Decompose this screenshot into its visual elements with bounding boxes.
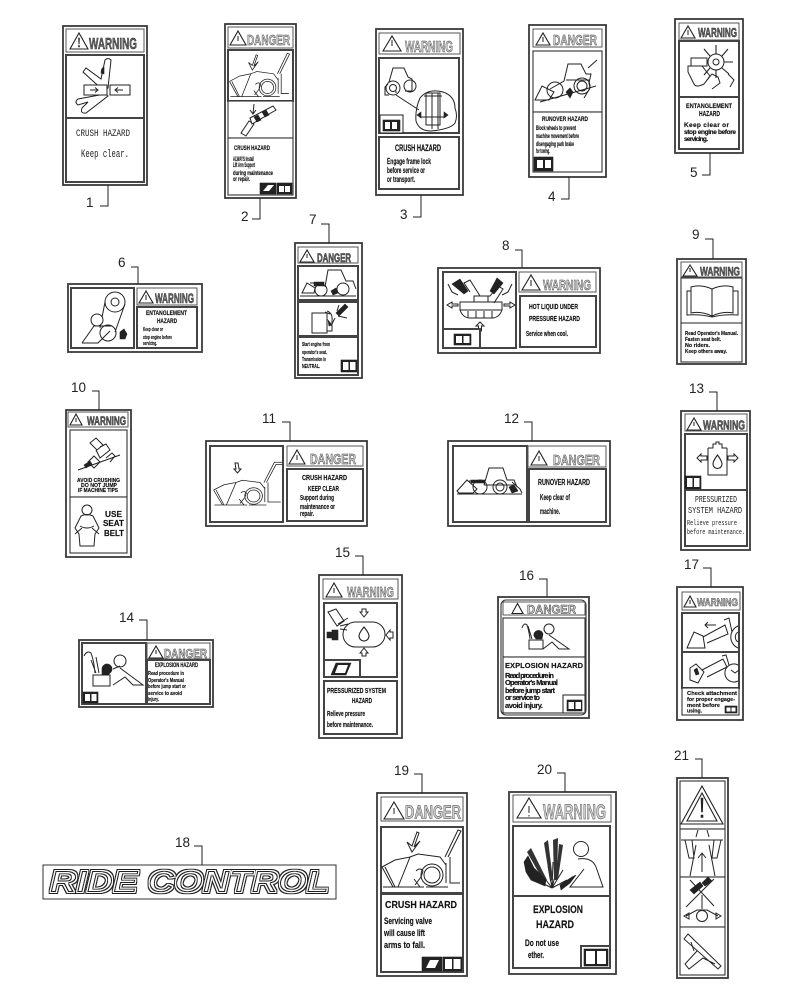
panel: text: CRUSH HAZARD xyxy=(302,473,347,482)
panel: text: HAZARD xyxy=(699,111,720,118)
callout 21 xyxy=(674,748,702,778)
callout 12 xyxy=(504,411,532,441)
panel: text: service to avoid xyxy=(148,691,182,697)
decal 17: check attachment xyxy=(677,587,743,720)
callout 20: 20 xyxy=(537,762,552,777)
panel: text: SYSTEM HAZARD xyxy=(688,506,742,516)
panel: battery explosion xyxy=(503,618,585,657)
header: warning xyxy=(379,33,460,56)
header: danger: DANGER xyxy=(553,452,600,469)
panel: text: machine. xyxy=(540,507,560,516)
panel: manual icon xyxy=(324,660,360,677)
panel: text: for proper engage- xyxy=(687,697,735,703)
panel: text: operator's seat. xyxy=(302,350,327,356)
panel: lift arm illustration xyxy=(210,446,283,522)
panel: seat belt: BELT xyxy=(104,529,124,538)
callout 2 xyxy=(241,198,260,224)
panel: text: for towing. xyxy=(536,149,550,155)
panel: text: HOT LIQUID UNDER xyxy=(529,304,578,311)
panel: text: CRUSH HAZARD xyxy=(395,143,441,153)
panel: text: PRESSURIZED xyxy=(695,495,737,505)
panel: text: Keep clear or xyxy=(143,327,163,333)
callout 15: 15 xyxy=(335,545,350,560)
decal 7: danger runover and start xyxy=(295,243,362,378)
panel: text: disengaging park brake xyxy=(536,142,574,148)
panel: text: ment before xyxy=(687,703,720,709)
callout 5 xyxy=(690,153,710,180)
header: warning: WARNING xyxy=(700,264,740,278)
callout 18: 18 xyxy=(175,835,190,850)
panel: text: avoid injury. xyxy=(505,701,543,710)
callout 18 xyxy=(175,835,202,865)
panel: hand with shock xyxy=(298,302,358,336)
panel: text: Start engine from xyxy=(302,342,330,348)
panel: text xyxy=(533,112,602,172)
panel: text xyxy=(147,660,210,704)
decal 14: explosion hazard horizontal xyxy=(79,640,213,707)
panel: text: CRUSH HAZARD xyxy=(385,899,457,911)
header: danger: DANGER xyxy=(527,602,576,616)
header: danger: DANGER xyxy=(553,32,597,49)
panel: text: EXPLOSION HAZARD xyxy=(155,663,198,669)
callout 7 xyxy=(309,212,329,243)
callout 11: 11 xyxy=(262,411,276,426)
panel: text xyxy=(682,688,739,715)
callout 14: 14 xyxy=(119,610,135,625)
panel: text: NEUTRAL. xyxy=(302,364,320,370)
panel: loader illustration xyxy=(298,266,358,300)
panel: text: stop engine before xyxy=(143,335,172,341)
panel: text: before maintenance. xyxy=(327,720,373,729)
header: danger xyxy=(533,29,602,49)
panel: lift arm illustration xyxy=(381,827,463,893)
panel: text xyxy=(228,138,293,195)
panel: alert triangle xyxy=(680,781,725,829)
panel: lift arrow xyxy=(680,829,725,877)
decal 11: crush hazard keep clear xyxy=(206,441,367,526)
callout 10 xyxy=(71,380,99,410)
decal 19: crush hazard valve xyxy=(377,793,467,976)
panel: text: RUNOVER HAZARD xyxy=(538,478,590,487)
header: warning xyxy=(66,29,144,53)
panel: manual and text xyxy=(681,278,742,362)
panel: text: RUNOVER HAZARD xyxy=(542,116,588,123)
panel: text: KEEP CLEAR xyxy=(308,484,339,493)
panel: text: CRUSH HAZARD xyxy=(234,145,270,152)
callout 7: 7 xyxy=(309,212,317,227)
panel: text: before jump start or xyxy=(148,684,187,690)
callout 12: 12 xyxy=(504,411,519,426)
panel: text: Relieve pressure xyxy=(687,520,737,528)
panel: text xyxy=(679,97,739,149)
panel: text: Keep clear or xyxy=(684,122,729,129)
header: danger: DANGER xyxy=(405,802,461,822)
panel: crush text: CRUSH HAZARD xyxy=(76,129,130,140)
callout 17: 17 xyxy=(684,557,699,572)
header: warning: WARNING xyxy=(543,277,591,294)
panel: text: HAZARD xyxy=(352,696,372,705)
header: danger: DANGER xyxy=(247,32,290,49)
panel: text xyxy=(520,296,596,347)
header: warning: WARNING xyxy=(543,801,606,824)
panel: text xyxy=(287,469,363,521)
panel: text: during maintenance xyxy=(233,171,273,177)
panel: tipping: DO NOT JUMP xyxy=(81,483,117,489)
callout 3: 3 xyxy=(400,207,408,222)
panel: text: or transport. xyxy=(387,175,415,184)
panel: text: ENTANGLEMENT xyxy=(146,310,187,317)
panel: text: maintenance or xyxy=(300,502,335,511)
panel: text: Keep clear of xyxy=(540,493,570,502)
header: danger xyxy=(287,446,363,468)
panel: text: Check attachment xyxy=(687,691,737,697)
callout 2: 2 xyxy=(241,209,249,224)
panel: pressure injection xyxy=(324,603,397,677)
panel: text xyxy=(298,337,358,375)
panel: manual and text: Keep others away. xyxy=(685,349,728,355)
panel: lift arm illustration xyxy=(228,50,293,101)
panel: text: using. xyxy=(687,708,702,714)
panel: text: ALWAYS Install xyxy=(233,157,254,163)
panel: attachment top xyxy=(682,613,739,652)
decal 5: entanglement hazard xyxy=(675,19,743,153)
header: warning: WARNING xyxy=(405,39,453,56)
decal 6: entanglement hazard horizontal xyxy=(68,284,202,352)
panel: seat belt xyxy=(70,497,127,553)
header: warning xyxy=(519,272,596,294)
callout 1 xyxy=(86,185,108,210)
header: danger: DANGER xyxy=(317,251,351,265)
callout 13 xyxy=(689,381,717,411)
panel: text: will cause lift xyxy=(383,928,425,938)
panel: text: Block wheels to prevent xyxy=(536,126,576,132)
decal 15: pressurized system hazard xyxy=(319,575,402,738)
panel: crush illustration xyxy=(66,55,144,118)
panel: seat belt: SEAT xyxy=(103,519,124,528)
callout 5: 5 xyxy=(690,165,698,180)
panel: text: EXPLOSION HAZARD xyxy=(505,661,584,670)
decal 9: read operator's manual xyxy=(677,259,746,364)
panel: text: ether. xyxy=(528,950,544,960)
panel: explosion illustration xyxy=(513,826,610,896)
header: warning xyxy=(513,795,611,824)
panel: text: PRESSURIZED SYSTEM xyxy=(327,686,386,695)
panel: manual and text: No riders. xyxy=(685,343,711,349)
panel: text: repair. xyxy=(300,509,314,518)
header: warning: WARNING xyxy=(155,290,194,306)
panel: loader illustration xyxy=(453,446,527,522)
panel: rotating auger xyxy=(679,41,739,97)
callout 8 xyxy=(502,238,522,268)
callout 11 xyxy=(262,411,290,441)
panel: text xyxy=(503,657,585,713)
header: danger: DANGER xyxy=(164,646,207,661)
callout 20 xyxy=(537,762,565,792)
callout 1: 1 xyxy=(86,195,94,210)
panel: tipping xyxy=(70,430,127,497)
callout 19: 19 xyxy=(394,763,409,778)
panel: text: Operator's Manual xyxy=(505,678,558,687)
panel: text: injury. xyxy=(148,697,159,703)
panel: text xyxy=(324,681,397,734)
callout 4 xyxy=(548,177,569,204)
decal 8: hot liquid under pressure xyxy=(438,268,600,353)
panel: text: servicing. xyxy=(684,136,708,143)
header: warning: WARNING xyxy=(347,584,394,601)
panel: text: or repair. xyxy=(233,177,250,183)
header: warning: WARNING xyxy=(697,597,738,609)
panel: text: HAZARD xyxy=(157,318,177,325)
decal 4: runover hazard xyxy=(529,25,606,177)
panel: text: Operator's Manual xyxy=(148,678,184,684)
panel: crush text xyxy=(66,118,144,182)
callout 17 xyxy=(684,557,711,587)
panel: hot liquid illustration xyxy=(443,272,516,348)
panel: text: arms to fall. xyxy=(384,940,425,950)
panel: text: before service or xyxy=(387,166,425,175)
panel: text: Support during xyxy=(300,493,334,502)
header: warning: WARNING xyxy=(89,36,137,53)
callout 3 xyxy=(400,195,421,222)
decal 1: crush hazard warning xyxy=(63,26,147,185)
panel: text: before maintenance. xyxy=(687,529,745,537)
panel: crush text: Keep clear. xyxy=(81,149,129,161)
panel: manual and text: Read Operator's Manual. xyxy=(685,331,739,337)
decal 20: explosion hazard ether xyxy=(509,792,616,974)
panel: battery explosion xyxy=(82,643,146,704)
panel: text xyxy=(513,896,610,968)
panel: text: Servicing valve xyxy=(384,916,432,926)
panel: frame lock illustration xyxy=(379,58,459,133)
callout 19 xyxy=(394,763,422,793)
panel: text: Service when cool. xyxy=(526,331,568,338)
panel: steering symbol xyxy=(680,927,725,975)
panel: text: Transmission in xyxy=(302,357,326,363)
header: warning xyxy=(323,579,398,601)
callout 8: 8 xyxy=(502,238,510,253)
header: warning: WARNING xyxy=(87,414,126,428)
callout 10: 10 xyxy=(71,380,86,395)
callout 14 xyxy=(119,610,147,640)
callout 15 xyxy=(335,545,363,575)
panel: tipping: IF MACHINE TIPS xyxy=(78,488,118,494)
panel: text xyxy=(137,307,197,348)
panel: lift arm support xyxy=(228,101,293,138)
panel: text: Read procedure in xyxy=(148,671,184,677)
decal 3: crush hazard frame lock xyxy=(376,29,463,195)
panel: text: EXPLOSION xyxy=(533,904,583,916)
panel: text xyxy=(685,490,747,546)
header: warning: WARNING xyxy=(698,25,737,40)
decal 13: pressurized system hazard xyxy=(681,411,750,550)
panel: runover illustration xyxy=(533,51,602,112)
panel: text: Do not use xyxy=(525,938,559,948)
decal 12: runover hazard horizontal xyxy=(448,441,610,526)
panel: text: servicing. xyxy=(143,341,157,347)
header: danger: DANGER xyxy=(310,451,356,468)
panel: text: Lift Arm Support xyxy=(233,163,255,169)
header: danger xyxy=(381,797,463,822)
panel: text: HAZARD xyxy=(536,919,574,931)
panel: text: Relieve pressure xyxy=(327,709,365,718)
callout 6 xyxy=(118,255,138,284)
decal 21: symbol strip xyxy=(677,778,728,978)
panel: text: ENTANGLEMENT xyxy=(686,103,732,110)
callout 9: 9 xyxy=(692,227,700,242)
decal 18: ride control xyxy=(43,864,336,899)
callout 21: 21 xyxy=(674,748,689,763)
panel: manual and text: Fasten seat belt. xyxy=(685,337,722,343)
header: warning: WARNING xyxy=(703,418,745,432)
panel: text: or service to xyxy=(505,693,540,702)
callout 4: 4 xyxy=(548,189,556,204)
panel: pressure cylinder xyxy=(685,434,747,490)
decal 16: explosion hazard xyxy=(498,597,589,718)
wordmark: RIDE CONTROL xyxy=(50,864,329,899)
panel: text: stop engine before xyxy=(684,129,736,136)
panel: text xyxy=(379,137,459,189)
panel: belt illustration xyxy=(71,288,134,348)
decal 10: avoid crushing, seat belt xyxy=(66,410,131,557)
panel: text: machine movement before xyxy=(536,134,579,140)
callout 13: 13 xyxy=(689,381,704,396)
panel: text xyxy=(529,469,606,522)
decal 2: crush hazard danger xyxy=(225,24,296,198)
panel: seat belt: USE xyxy=(105,510,123,519)
callout 16: 16 xyxy=(519,568,534,583)
panel: machine symbol xyxy=(680,877,725,927)
callout 16 xyxy=(519,568,547,597)
header: warning xyxy=(68,412,128,428)
panel: text: PRESSURE HAZARD xyxy=(529,316,580,323)
callout 6: 6 xyxy=(118,255,126,270)
callout 9 xyxy=(692,227,713,259)
header: danger xyxy=(528,446,606,469)
panel: text: Engage frame lock xyxy=(387,157,431,166)
panel: text xyxy=(381,894,463,972)
panel: text: Read procedure in xyxy=(505,671,554,680)
panel: text: before jump start xyxy=(505,686,556,695)
panel: tipping: AVOID CRUSHING xyxy=(77,478,120,484)
panel: attachment bottom xyxy=(682,652,739,688)
header: danger xyxy=(228,27,293,49)
